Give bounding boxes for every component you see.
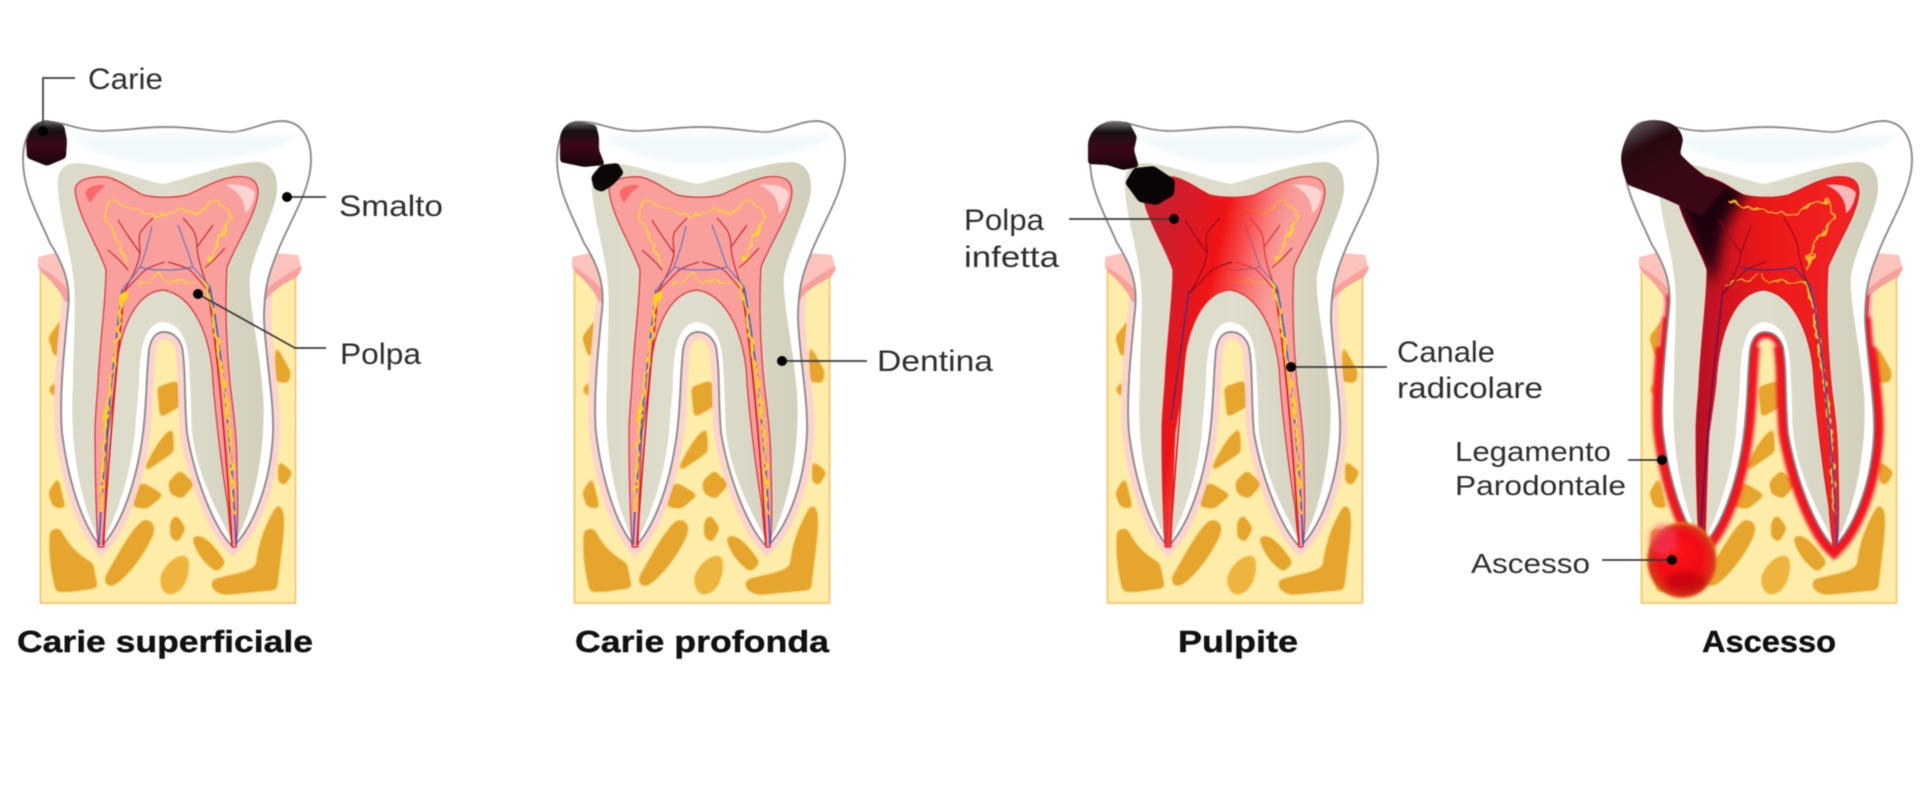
label: ascesso <box>1471 548 1677 579</box>
label: carie: Carie <box>88 63 163 96</box>
deep caries <box>560 121 605 167</box>
label: dentina: Dentina <box>877 345 993 378</box>
label: dentina <box>777 345 993 378</box>
pulp highlight <box>1826 185 1856 213</box>
pulp with nerves <box>75 177 258 547</box>
panel: carie superficiale <box>17 120 313 659</box>
red inflamed ligament <box>1650 292 1886 562</box>
label: smalto <box>282 190 443 223</box>
heading: carie profonda: Carie profonda <box>575 624 830 659</box>
label: legamento parodontale <box>1455 436 1667 501</box>
label: polpa <box>193 289 421 371</box>
superficial caries <box>26 120 67 166</box>
label: polpa infetta: Polpa <box>964 204 1044 237</box>
label: carie <box>38 63 163 136</box>
panel: ascesso <box>1621 120 1912 659</box>
heading: carie superficiale: Carie superficiale <box>17 624 313 659</box>
caries in dentin <box>591 163 624 192</box>
nerves in infected pulp <box>1700 200 1837 545</box>
label: legamento parodontale: Parodontale <box>1455 470 1626 501</box>
panel: carie profonda <box>557 121 845 659</box>
label: polpa infetta <box>964 204 1179 274</box>
infected pulp overlay <box>1142 177 1325 547</box>
label: canale radicolare: radicolare <box>1397 372 1543 405</box>
label: polpa infetta: infetta <box>964 241 1059 274</box>
heading: pulpite: Pulpite <box>1178 624 1298 659</box>
tooth illustration <box>1088 121 1378 603</box>
abscess <box>1647 522 1717 598</box>
label: ascesso: Ascesso <box>1471 548 1590 579</box>
label: legamento parodontale: Legamento <box>1455 436 1611 467</box>
caries spreading to pulp <box>1621 120 1725 216</box>
label: canale radicolare: Canale <box>1397 336 1495 369</box>
label: polpa: Polpa <box>340 338 421 371</box>
label: smalto: Smalto <box>339 190 443 223</box>
tooth illustration <box>557 121 845 603</box>
caries reaching pulp <box>1125 166 1175 205</box>
label: canale radicolare <box>1286 336 1543 405</box>
tooth crown, enamel and dentin <box>23 121 311 547</box>
heading: ascesso: Ascesso <box>1702 624 1836 659</box>
bone and gum <box>23 121 311 603</box>
caries in enamel <box>1088 122 1139 170</box>
panel: pulpite <box>1088 121 1378 659</box>
tooth illustration <box>1621 120 1912 603</box>
